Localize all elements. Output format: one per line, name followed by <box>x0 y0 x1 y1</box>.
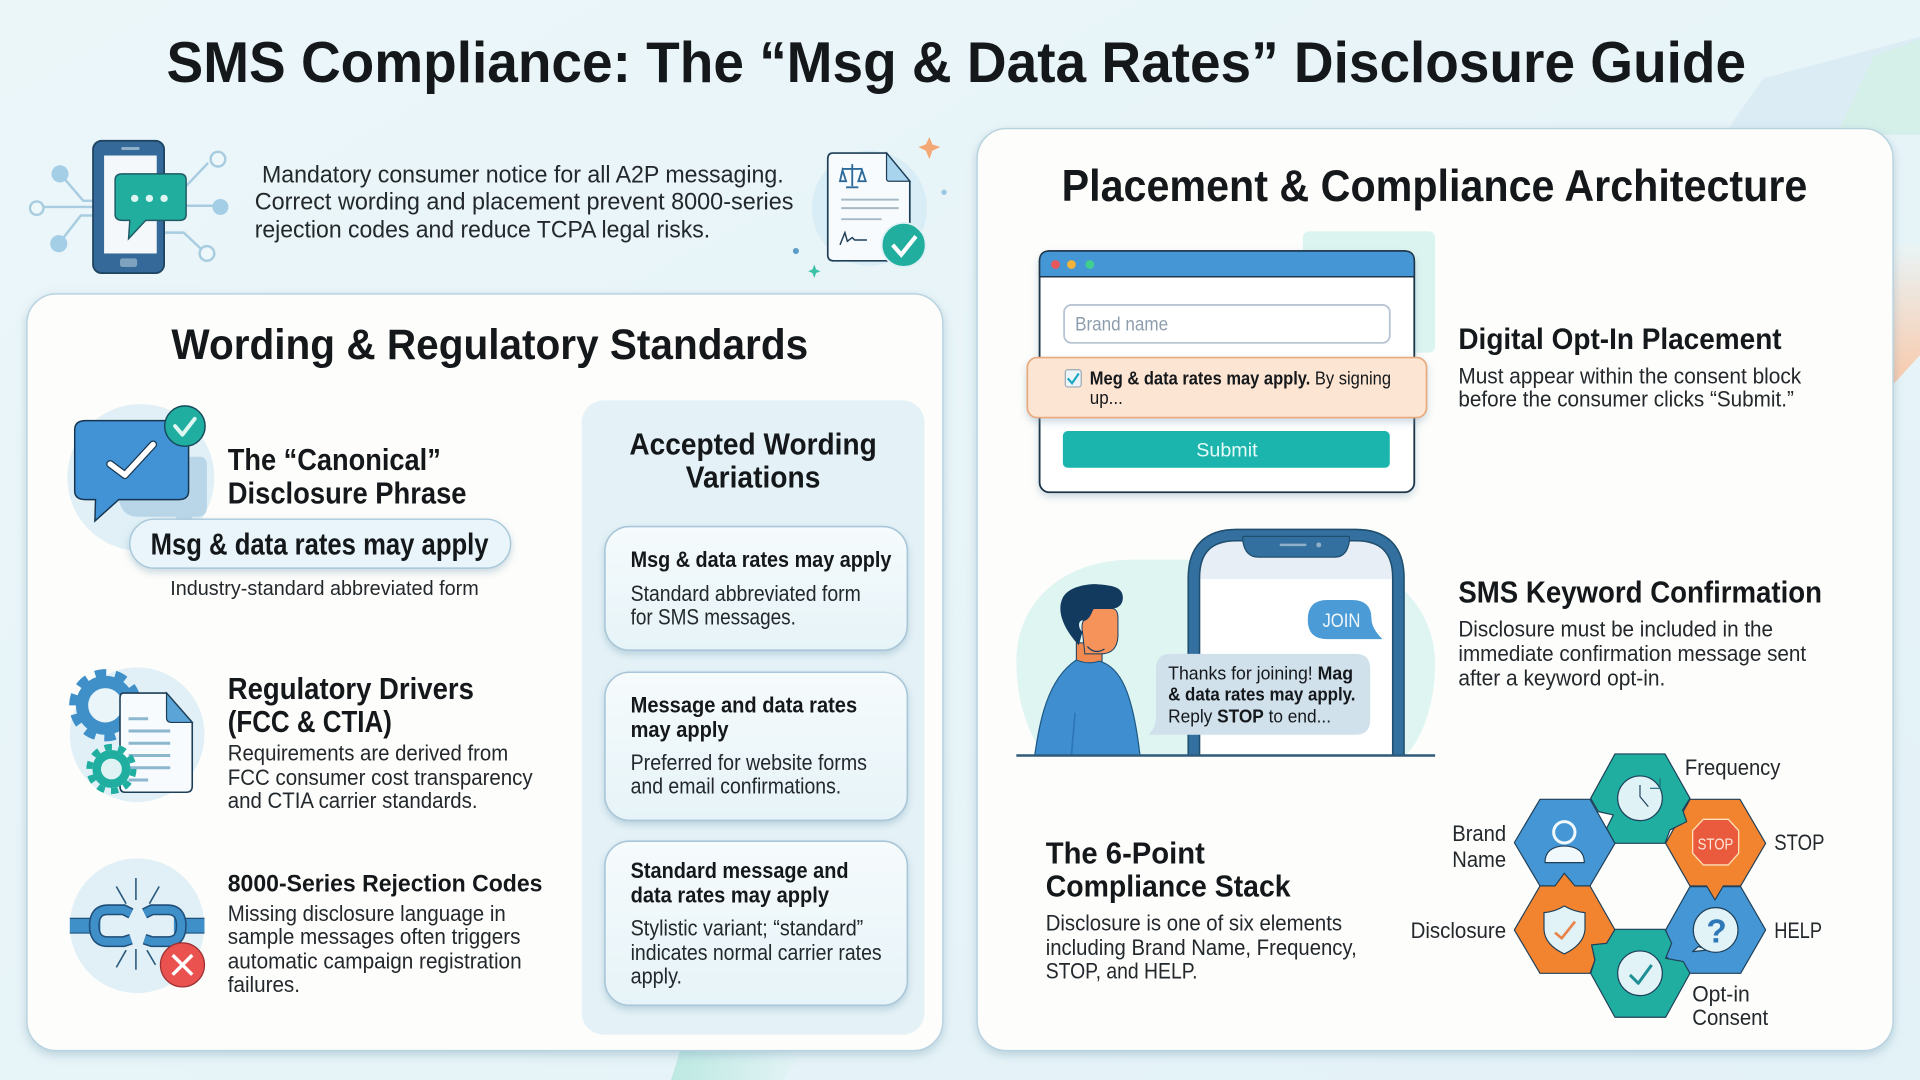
text: sms keyword confirmation: Disclosure must be included in the <box>1458 617 1773 642</box>
card: standard message and data rates: apply. <box>631 963 682 988</box>
hexagon: frequency <box>1591 754 1690 843</box>
card: standard message and data rates <box>605 841 907 1005</box>
icon: legal document with check <box>793 137 947 278</box>
hexagon: brand name <box>1514 799 1615 886</box>
intro text: Mandatory consumer notice for all A2P messaging. <box>262 161 784 188</box>
chat bubble: confirmation message: Thanks for joining! Mag <box>1168 663 1353 684</box>
text: 6-point compliance stack <box>1046 836 1357 983</box>
text: 6-point compliance stack: Compliance Stack <box>1046 869 1292 903</box>
hexagon: stop: STOP <box>1698 836 1733 853</box>
callout: consent block highlight <box>1027 358 1427 418</box>
text: regulatory drivers: FCC consumer cost transparency <box>228 765 533 790</box>
card: message and data rates <box>605 672 907 820</box>
icon: phone with chat bubble and network <box>30 141 228 273</box>
chat bubble: confirmation message: Reply STOP to end... <box>1168 705 1331 726</box>
hexagon labels: Name <box>1452 847 1506 872</box>
text: digital opt-in placement: Digital Opt-In Placement <box>1458 323 1782 356</box>
chat bubble: confirmation message: & data rates may apply. <box>1168 683 1356 704</box>
text: canonical disclosure phrase heading <box>228 443 467 510</box>
heading: wording and regulatory standards: Wording & Regulatory Standards <box>171 321 808 369</box>
person <box>1035 584 1140 756</box>
hexagon labels: Brand <box>1452 821 1506 846</box>
icon: gears and document <box>70 667 204 802</box>
card: standard message and data rates: Standard message and <box>631 858 849 883</box>
panel: accepted wording variations <box>582 400 924 1035</box>
illustration: person with phone keyword opt-in <box>1016 535 1435 756</box>
hexagon: disclosure <box>1514 873 1615 973</box>
text: regulatory drivers: and CTIA carrier standards. <box>228 788 478 813</box>
hexagon labels: Frequency <box>1685 755 1780 780</box>
hexagon: stop <box>1666 799 1766 900</box>
text: regulatory drivers: Regulatory Drivers <box>228 672 474 706</box>
text: sms keyword confirmation <box>1458 575 1822 691</box>
text: 8000-series rejection codes: sample messages often triggers <box>228 924 520 949</box>
text: 8000-series rejection codes: automatic campaign registration <box>228 949 522 974</box>
card: standard message and data rates: Stylistic variant; “standard” <box>631 916 863 941</box>
text: 8000-series rejection codes <box>228 870 542 997</box>
chat bubble: join: JOIN <box>1322 610 1360 632</box>
card: msg and data rates: for SMS messages. <box>631 604 796 629</box>
intro text: rejection codes and reduce TCPA legal risks. <box>255 217 710 244</box>
input: brand name <box>1064 305 1390 343</box>
hexagon: help: ? <box>1706 913 1727 950</box>
button: submit <box>1063 431 1390 468</box>
heading: placement and compliance architecture: Placement & Compliance Architecture <box>1062 162 1807 211</box>
hexagon labels: HELP <box>1774 918 1822 943</box>
intro text <box>255 161 793 244</box>
card: msg and data rates <box>605 527 907 650</box>
text: 8000-series rejection codes: failures. <box>228 972 300 997</box>
diagram: six-point hexagon ring <box>1411 754 1824 1030</box>
callout: canonical phrase pill: Msg & data rates may apply <box>151 528 489 562</box>
chat bubble: confirmation message <box>1149 654 1370 735</box>
panel: placement and compliance architecture <box>977 129 1893 1051</box>
hexagon: help <box>1666 887 1766 973</box>
card: message and data rates: may apply <box>631 717 729 742</box>
illustration: opt-in form window <box>1027 231 1435 492</box>
text: sms keyword confirmation: SMS Keyword Confirmation <box>1458 575 1822 609</box>
text: digital opt-in placement: Must appear within the consent block <box>1458 363 1802 388</box>
heading: accepted wording variations: Accepted Wording <box>629 427 877 461</box>
title: SMS Compliance: The “Msg & Data Rates” Disclosure Guide <box>167 31 1746 95</box>
text: sms keyword confirmation: after a keyword opt-in. <box>1458 666 1665 691</box>
callout: canonical phrase pill <box>130 519 511 568</box>
text: sms keyword confirmation: immediate confirmation message sent <box>1458 641 1806 666</box>
hexagon labels: Consent <box>1692 1005 1768 1030</box>
intro text: Correct wording and placement prevent 8000-series <box>255 188 793 215</box>
hexagon: opt-in consent <box>1591 929 1690 1017</box>
card: msg and data rates: Standard abbreviated form <box>631 581 861 606</box>
button: submit: Submit <box>1196 440 1258 462</box>
text: 8000-series rejection codes: 8000-Series Rejection Codes <box>228 870 542 897</box>
hexagon labels <box>1411 755 1824 1030</box>
card: message and data rates: and email confirmations. <box>631 773 841 798</box>
text: digital opt-in placement: before the consumer clicks “Submit.” <box>1458 387 1794 412</box>
card: standard message and data rates: indicates normal carrier rates <box>631 940 882 965</box>
text: canonical disclosure phrase heading: Disclosure Phrase <box>228 476 467 510</box>
icon: canonical chat bubble <box>67 404 214 551</box>
hexagon labels: Disclosure <box>1411 918 1506 943</box>
panel: wording and regulatory standards <box>27 294 943 1051</box>
card: msg and data rates: Msg & data rates may apply <box>631 547 892 572</box>
text: 6-point compliance stack: including Brand Name, Frequency, <box>1046 935 1357 960</box>
text: 6-point compliance stack: STOP, and HELP. <box>1046 958 1198 983</box>
card: standard message and data rates: data rates may apply <box>631 882 830 907</box>
card: message and data rates: Preferred for website forms <box>631 750 867 775</box>
text: 6-point compliance stack: Disclosure is one of six elements <box>1046 911 1342 936</box>
heading: accepted wording variations <box>629 427 877 494</box>
card: message and data rates: Message and data rates <box>631 693 857 718</box>
caption: industry-standard form: Industry-standard abbreviated form <box>170 578 479 600</box>
callout: consent block highlight: up... <box>1090 387 1123 408</box>
input: brand name: Brand name <box>1075 315 1168 336</box>
text: canonical disclosure phrase heading: The “Canonical” <box>228 443 441 477</box>
callout: consent block highlight: Meg & data rates may apply. By signing <box>1090 367 1391 388</box>
icon: broken chain with error <box>70 858 204 993</box>
text: 6-point compliance stack: The 6-Point <box>1046 836 1205 870</box>
hexagon labels: STOP <box>1774 830 1824 855</box>
text: regulatory drivers: (FCC & CTIA) <box>228 705 392 739</box>
text: regulatory drivers <box>228 672 533 813</box>
text: digital opt-in placement <box>1458 323 1802 412</box>
text: regulatory drivers: Requirements are derived from <box>228 740 508 765</box>
chat bubble: join <box>1308 600 1382 639</box>
text: 8000-series rejection codes: Missing disclosure language in <box>228 901 506 926</box>
hexagon labels: Opt-in <box>1692 982 1750 1007</box>
heading: accepted wording variations: Variations <box>686 460 820 494</box>
